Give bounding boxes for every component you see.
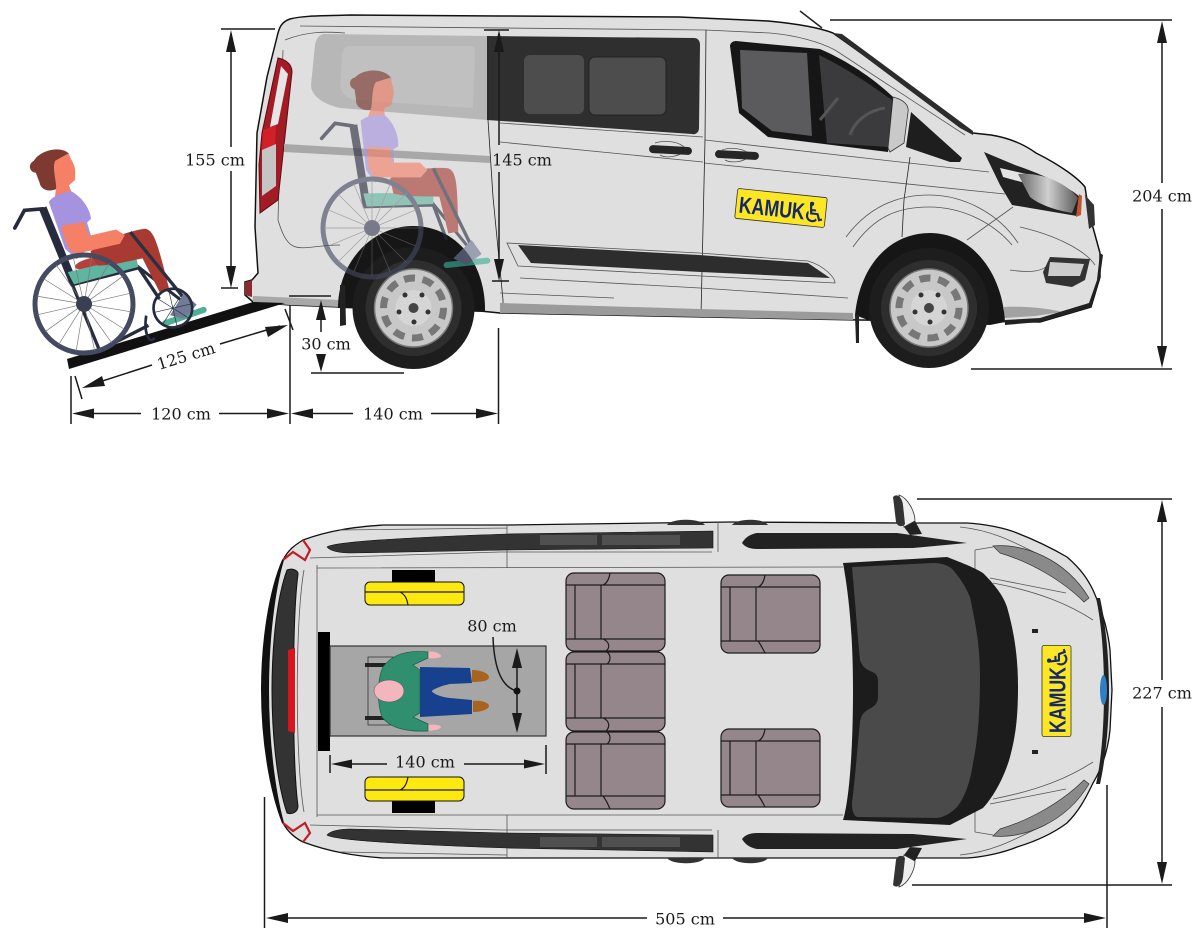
- rear side window strip top: [327, 531, 713, 553]
- ghost shirt: [361, 115, 398, 183]
- grille: [1096, 598, 1109, 784]
- bonnet creases: [975, 547, 1093, 835]
- dimension: floor height 30 cm: [289, 296, 404, 373]
- rear wheel arch: [338, 226, 485, 312]
- van body side: [245, 15, 1100, 322]
- mirror top: [893, 495, 922, 535]
- passenger seen from above: [365, 651, 489, 731]
- ramp: [67, 302, 285, 369]
- dimension: door opening 140 cm: [291, 328, 498, 424]
- wheelchair anchor rails top: [365, 570, 464, 605]
- ghost back wheel: [323, 179, 421, 277]
- red seat shadow: [74, 254, 109, 272]
- dimension: vehicle length 505 cm: 505 cm: [655, 910, 715, 928]
- Kamuk logo on door: ♿: [800, 195, 829, 231]
- rear mud flap: [340, 285, 346, 326]
- front mud flap: [855, 315, 859, 343]
- ghost seat cushion: [363, 193, 433, 207]
- sliding door dark window: [487, 36, 700, 134]
- dimension: door height 145 cm: [484, 30, 552, 281]
- dimension: floor height 30 cm: 30 cm: [301, 334, 351, 354]
- dimension: ramp length 125 cm: [75, 309, 293, 399]
- rear side window strip bottom: [327, 829, 713, 852]
- dimension: rear door height 155 cm: 155 cm: [185, 150, 245, 170]
- ford badge: [1100, 675, 1107, 705]
- shoes: [472, 670, 489, 712]
- head: [374, 680, 404, 702]
- roof and crease lines: [278, 26, 1095, 315]
- tail light: [259, 58, 292, 213]
- dimension: door height 145 cm: 145 cm: [492, 150, 552, 170]
- row 2 seat 2: [566, 652, 665, 731]
- rear bumper: [245, 280, 252, 297]
- leg rest bar: [130, 223, 188, 312]
- dimension: bay width 80 cm: [467, 616, 522, 733]
- bonnet marks: [1032, 629, 1038, 754]
- jeans: [420, 667, 472, 717]
- red corner top: [283, 540, 310, 560]
- back wheel: [25, 245, 143, 363]
- door handle bumps top: [667, 520, 768, 525]
- ghost footplate: [447, 261, 487, 265]
- top view van: [262, 495, 1112, 887]
- ghost shoe: [453, 240, 482, 265]
- seat cushion: [68, 256, 139, 285]
- van body top: [262, 522, 1112, 858]
- headlight top: [993, 546, 1089, 602]
- cabin floor outline: [297, 522, 1040, 858]
- Kamuk logo on bonnet: KAMUK: [1044, 667, 1070, 733]
- dimension: vehicle width 227 cm: 227 cm: [1132, 684, 1192, 702]
- red corner bottom: [283, 823, 310, 842]
- rear ghost window: [311, 34, 487, 120]
- ghost arm: [367, 147, 427, 177]
- headlight bottom: [993, 780, 1089, 836]
- Kamuk logo on bonnet: ♿: [1042, 644, 1074, 670]
- front bumper lower trim: [1004, 307, 1062, 318]
- ghost leg rest bar: [433, 168, 473, 250]
- rear glass and bumper: [262, 560, 298, 823]
- row 1 seat left: [721, 575, 820, 653]
- chair handles: [365, 663, 386, 720]
- dimension: vehicle width 227 cm: [912, 499, 1192, 885]
- shoe: [166, 291, 199, 322]
- dimension: vehicle height 204 cm: 204 cm: [1132, 186, 1192, 206]
- wing mirror: [888, 97, 908, 152]
- row 1 seat right: [721, 729, 820, 807]
- cab side window top: [742, 533, 967, 549]
- side rubbing strip: [518, 245, 830, 278]
- dimension: bay length 140 cm: [330, 745, 546, 774]
- door handles: [649, 145, 759, 160]
- door handle bumps bottom: [667, 858, 768, 863]
- ghost face and neck: [367, 78, 394, 118]
- mirror bottom: [893, 847, 922, 887]
- dimension: rear door height 155 cm: [185, 29, 275, 288]
- wheelchair space floor mat: [330, 646, 546, 736]
- green jumper: [378, 651, 428, 731]
- dimension: bay width 80 cm: 80 cm: [467, 616, 517, 636]
- chair frame: [11, 179, 194, 364]
- dimension: ramp reach 120 cm: 120 cm: [151, 404, 211, 424]
- sill band: [500, 303, 853, 320]
- side view van: [245, 11, 1103, 369]
- ghost leg: [390, 168, 458, 233]
- ghost chair frame: [322, 123, 473, 253]
- windscreen: [843, 557, 1018, 825]
- face and neck: [46, 153, 81, 198]
- cab door window: [730, 41, 893, 152]
- headlight: [984, 152, 1095, 229]
- cab side window bottom: [742, 833, 967, 849]
- wheelchair from above: [368, 657, 393, 725]
- wheelchair anchor rails bottom: [365, 777, 464, 813]
- arm: [61, 212, 127, 256]
- dimension: door opening 140 cm: 140 cm: [363, 404, 423, 424]
- front wheel: [869, 248, 989, 368]
- dimension: vehicle height 204 cm: [830, 20, 1192, 369]
- dimension: ramp reach 120 cm: [71, 305, 290, 424]
- ghost wheelchair user inside van: [322, 71, 487, 277]
- shirt: [48, 188, 99, 262]
- dimension: bay length 140 cm: 140 cm: [395, 752, 455, 772]
- Kamuk logo on door: KAMUK: [738, 192, 806, 224]
- fog lamp: [1043, 257, 1090, 287]
- caster wheel: [150, 285, 196, 331]
- row 2 seat 3: [566, 732, 665, 809]
- leg: [88, 226, 169, 305]
- door quarter glass: [906, 112, 962, 162]
- windscreen edge: [833, 33, 973, 135]
- rear wheel: [352, 247, 474, 369]
- hair: [27, 146, 76, 194]
- footplate: [164, 310, 205, 323]
- ghost hair: [350, 71, 391, 110]
- hands: [426, 651, 441, 731]
- ghost band through rear panel: [284, 144, 490, 163]
- antenna: [800, 11, 822, 28]
- dimension: ramp length 125 cm: 125 cm: [155, 338, 217, 374]
- front wheel arch: [855, 233, 1005, 325]
- wheelchair user on ramp: [0, 125, 208, 364]
- tail lift bar: [318, 632, 330, 751]
- dimension: vehicle length 505 cm: [264, 785, 1107, 928]
- row 2 seat 1: [566, 573, 665, 651]
